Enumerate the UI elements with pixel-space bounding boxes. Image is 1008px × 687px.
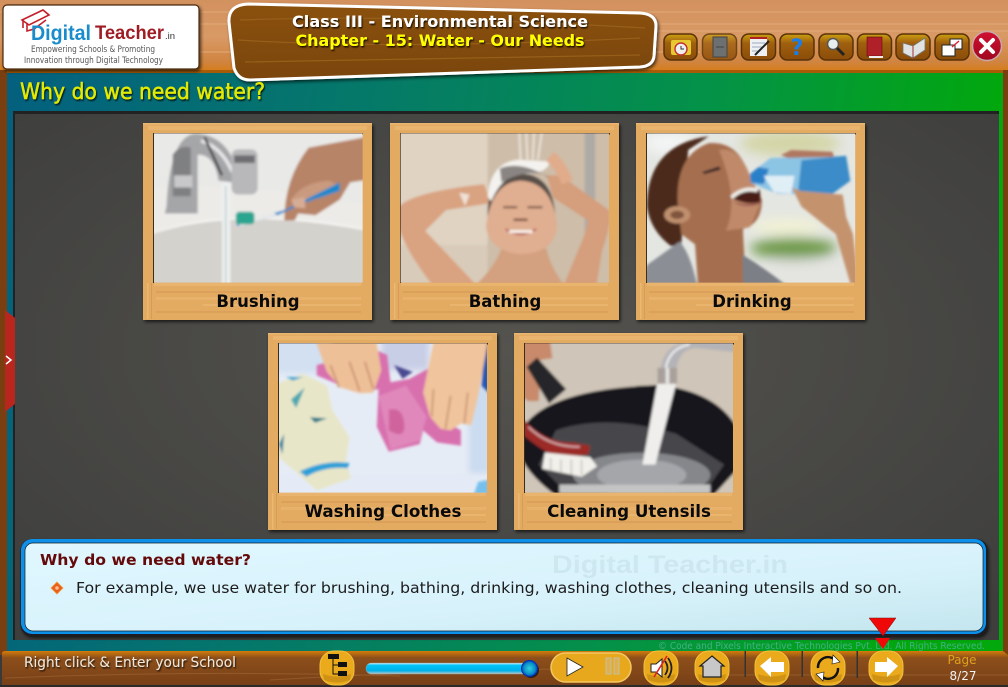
logo wordmark: Digital: [31, 22, 91, 45]
icon: window resize: [942, 39, 962, 56]
page counter: 8/27: [950, 669, 976, 683]
banner title: Class III - Environmental Science: [292, 12, 588, 31]
top wood bar: [0, 0, 1008, 73]
icon: notepad and pen: [750, 37, 769, 56]
chalkboard panel: [13, 111, 999, 640]
logo tagline: [24, 45, 163, 66]
photo: drinking: [647, 133, 856, 283]
bottom wood bar: [0, 651, 1008, 687]
label: bathing: Bathing: [469, 292, 541, 311]
button: previous: [755, 651, 789, 685]
label: washing clothes: Washing Clothes: [305, 501, 461, 521]
icon: close button: [972, 32, 1002, 60]
banner subtitle: Chapter - 15: Water - Our Needs: [296, 31, 584, 50]
label: drinking: Drinking: [712, 292, 792, 311]
icon: open book: [903, 38, 925, 58]
watermark: Digital Teacher.in: [552, 551, 788, 579]
copyright line: © Code and Pixels Interactive Technologies Pvt. Ltd. All Rights Reserved.: [658, 641, 985, 652]
button: home: [695, 651, 729, 685]
school name prompt: Right click & Enter your School: [24, 655, 236, 671]
card: washing clothes: [268, 333, 497, 530]
progress slider: [366, 660, 539, 678]
icon: help question mark: ?: [791, 36, 803, 61]
logo wordmark: Teacher: [95, 23, 165, 44]
photo: washing clothes: [279, 343, 487, 493]
photo: bathing: [400, 133, 609, 283]
label: brushing: Brushing: [216, 292, 300, 311]
explanation panel: [20, 539, 988, 636]
chapter banner: [229, 4, 656, 80]
button: reload: [811, 651, 845, 685]
card: drinking: [636, 123, 865, 320]
photo: brushing: [154, 133, 363, 283]
left side drawer tab: [5, 310, 15, 412]
icon: diamond bullet: [51, 582, 63, 594]
label: cleaning utensils: Cleaning Utensils: [547, 501, 711, 521]
panel heading: Why do we need water?: [40, 551, 251, 569]
toolbar separators: [744, 651, 858, 678]
button: topic tree: [320, 651, 354, 685]
logo panel: [3, 5, 199, 69]
icon: clock folder: [671, 40, 691, 55]
toolbar icons: [664, 32, 1002, 61]
icon: magnifier: [828, 38, 844, 55]
card: cleaning utensils: [511, 333, 745, 530]
button: next: [869, 651, 903, 685]
panel body text: For example, we use water for brushing, bathing, drinking, washing clothes, cleaning utensils and so on.: [76, 579, 902, 597]
logo tagline: Innovation through Digital Technology: [24, 56, 163, 66]
page counter: [947, 653, 977, 683]
slide heading: Why do we need water?: [20, 80, 265, 105]
icon: dictionary: [867, 37, 883, 58]
logo wordmark: .in: [165, 31, 175, 42]
logo tagline: Empowering Schools & Promoting: [31, 45, 155, 55]
icon: graduation cap: [22, 10, 49, 31]
card: bathing: [387, 123, 619, 320]
icon: reference book: [713, 37, 727, 57]
photo: cleaning utensils: [525, 343, 733, 493]
button: sound: [644, 651, 678, 685]
page counter: Page: [947, 653, 977, 667]
arrow: red next-page pointer: [869, 618, 896, 649]
card: brushing: [142, 123, 374, 320]
play pause control: [551, 653, 631, 682]
logo wordmark: [31, 22, 175, 45]
